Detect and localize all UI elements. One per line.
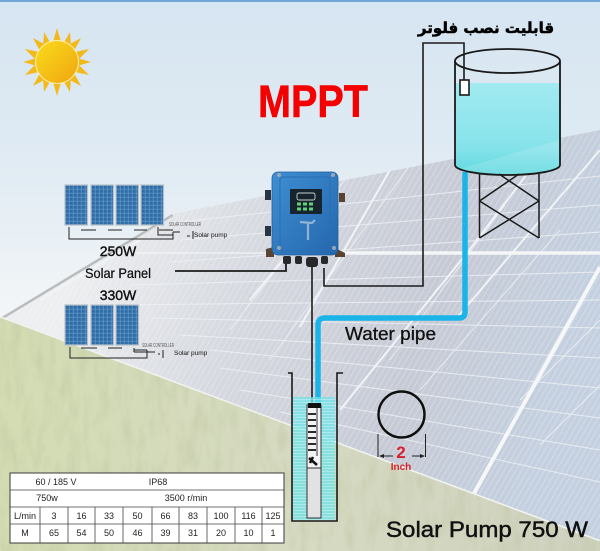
solar panel group: 330W: Solar pump — [174, 350, 208, 357]
pipe diameter diagram — [378, 392, 426, 473]
title: MPPT: MPPT — [258, 76, 368, 127]
solar panel group: 250W — [65, 185, 228, 239]
specification table: L/min — [14, 511, 36, 521]
specification table: 39 — [160, 528, 171, 538]
specification table: 100 — [213, 511, 229, 521]
specification table: 20 — [216, 528, 226, 538]
background: grass — [0, 310, 600, 551]
dimension unit: Inch — [391, 462, 411, 473]
pump cable — [311, 266, 313, 405]
solar panel group: 330W — [65, 305, 208, 358]
tank stand — [480, 174, 539, 238]
specification table: IP68 — [149, 477, 167, 487]
background: solar array — [0, 120, 600, 550]
label: Solar Pump 750 W: Solar Pump 750 W — [386, 517, 588, 542]
tank outline — [455, 61, 560, 175]
well casing — [288, 373, 343, 521]
heading: float capability: قابلیت نصب فلوتر — [417, 19, 554, 37]
specification table: 125 — [265, 511, 281, 521]
label: 330W: 330W — [100, 287, 137, 303]
controller screen — [290, 189, 322, 214]
tank water — [456, 83, 560, 175]
specification table: 33 — [104, 511, 114, 521]
specification table: 10 — [243, 528, 254, 538]
specification table: 50 — [104, 528, 114, 538]
icon: sun — [23, 28, 91, 96]
specification table: 116 — [241, 511, 256, 521]
well water — [293, 397, 335, 520]
water pipe — [318, 172, 465, 405]
specification table: 66 — [160, 511, 171, 521]
specification table: 50 — [132, 511, 143, 521]
specification table: 60 / 185 V — [35, 477, 77, 487]
solar panel group: 250W: Solar pump — [194, 232, 228, 239]
solar panel group: 330W: SOLAR CONTROLLER — [142, 343, 174, 349]
label: 250W: 250W — [100, 243, 137, 259]
specification table — [10, 473, 284, 543]
well and pump — [288, 373, 343, 521]
specification table: 31 — [188, 528, 198, 538]
label: Water pipe: Water pipe — [345, 324, 436, 344]
dimension value: 2 — [396, 443, 406, 462]
specification table: 3 — [51, 511, 57, 521]
submersible pump — [307, 403, 321, 518]
specification table: M — [21, 528, 29, 538]
water tank — [455, 49, 560, 238]
specification table: 54 — [76, 528, 87, 538]
specification table: 83 — [188, 511, 198, 521]
cable glands — [283, 256, 328, 267]
controller logo — [300, 220, 315, 240]
float switch — [460, 80, 469, 95]
specification table: 16 — [76, 511, 87, 521]
specification table: 750w — [36, 493, 58, 503]
solar panel cable — [175, 264, 286, 271]
specification table: 65 — [49, 528, 59, 538]
MPPT controller box — [265, 172, 345, 267]
specification table: 46 — [132, 528, 143, 538]
specification table: 1 — [270, 528, 276, 538]
specification table: 3500 r/min — [165, 493, 207, 503]
float wire — [324, 43, 464, 286]
solar panel group: 250W: SOLAR CONTROLLER — [169, 222, 201, 228]
label: Solar Panel: Solar Panel — [85, 265, 151, 281]
